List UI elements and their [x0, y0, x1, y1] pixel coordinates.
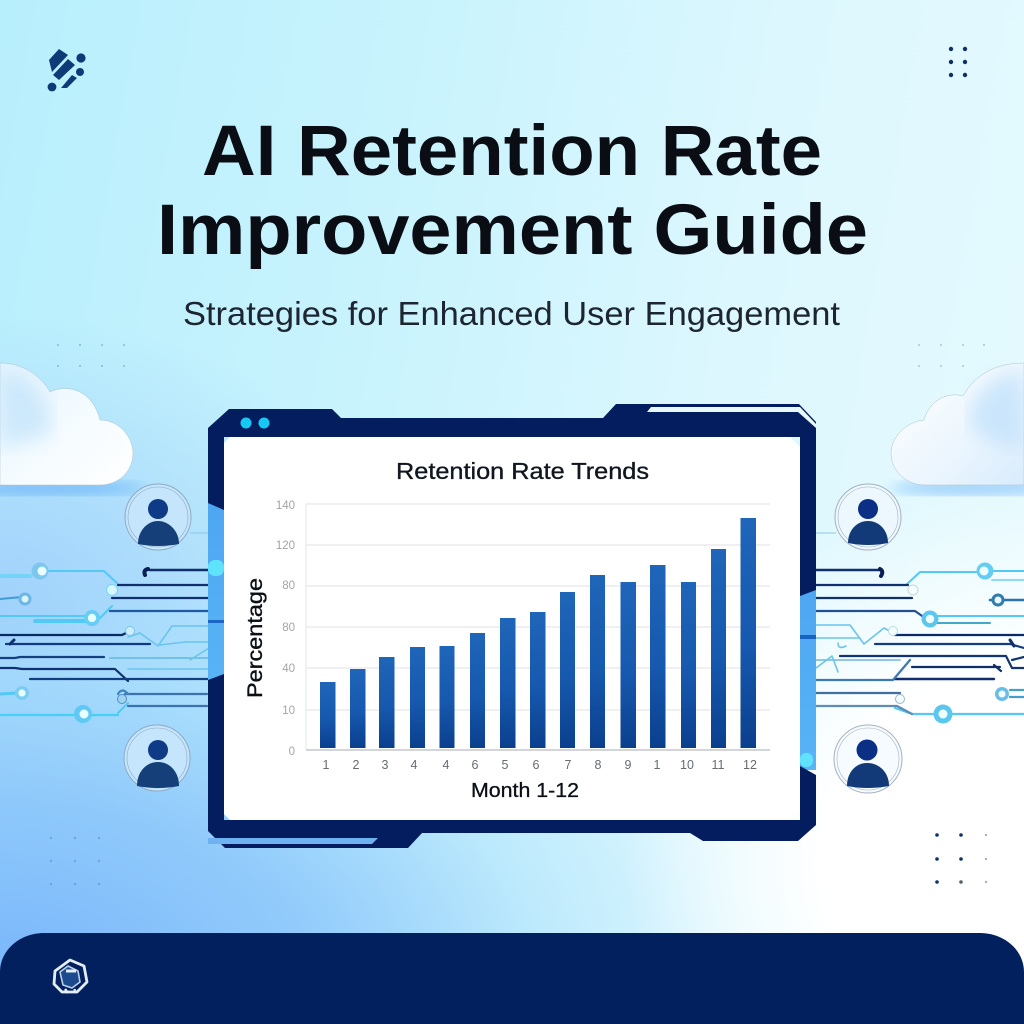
user avatar top left	[125, 484, 191, 550]
y axis labels: 140	[276, 500, 295, 512]
dot grid top right	[949, 47, 967, 77]
chart panel	[224, 437, 800, 820]
x axis labels: 4	[411, 758, 418, 772]
cloud left	[0, 363, 145, 495]
y axis labels: 120	[276, 540, 295, 552]
y axis labels: 10	[282, 705, 295, 717]
x axis labels	[323, 758, 757, 772]
user avatar bottom right	[834, 725, 902, 793]
left circuit lines	[0, 569, 209, 715]
footer logo icon	[54, 960, 87, 993]
user avatar top right	[835, 484, 901, 550]
left circuit nodes	[15, 562, 134, 723]
dot grid bottom right	[935, 833, 987, 884]
x axis labels: 8	[595, 758, 602, 772]
logo icon top left	[48, 49, 86, 91]
y axis labels: 80	[282, 580, 295, 592]
x axis labels: 5	[502, 758, 509, 772]
chart window frame	[208, 404, 816, 848]
x axis labels: 1	[323, 758, 330, 772]
x axis labels: 11	[712, 758, 725, 772]
faint dots above left cloud	[57, 344, 125, 367]
y axis labels	[276, 500, 295, 758]
x axis labels: 1	[654, 758, 661, 772]
right circuit lines	[816, 569, 1024, 714]
title: AI Retention Rate	[202, 112, 822, 191]
grid lines	[306, 504, 770, 750]
x axis labels: 9	[625, 758, 632, 772]
y axis labels: 80	[282, 622, 295, 634]
title	[157, 112, 868, 270]
x axis labels: 6	[472, 758, 479, 772]
x axis labels: 10	[680, 758, 694, 772]
y axis title: Percentage	[244, 578, 267, 698]
y axis labels: 0	[289, 746, 295, 758]
chart title: Retention Rate Trends	[396, 458, 649, 484]
faint dot grid bottom left	[50, 837, 100, 885]
cloud right	[890, 363, 1024, 495]
window dots	[240, 418, 270, 428]
x axis labels: 12	[743, 758, 757, 772]
bars	[320, 518, 756, 748]
subtitle: Strategies for Enhanced User Engagement	[183, 295, 840, 332]
x axis title: Month 1-12	[471, 780, 579, 802]
x axis labels: 7	[565, 758, 572, 772]
x axis labels: 4	[443, 758, 450, 772]
footer bar	[0, 933, 1024, 1024]
x axis labels: 3	[382, 758, 389, 772]
right circuit nodes	[888, 562, 1009, 724]
user avatar bottom left	[124, 725, 190, 791]
side cyan knobs	[208, 560, 813, 767]
x axis labels: 6	[533, 758, 540, 772]
connector lines from avatars	[190, 532, 836, 534]
x axis labels: 2	[353, 758, 360, 772]
faint dots above right cloud	[918, 344, 985, 367]
x axis	[306, 749, 770, 751]
title: Improvement Guide	[157, 191, 868, 270]
y axis labels: 40	[282, 663, 295, 675]
